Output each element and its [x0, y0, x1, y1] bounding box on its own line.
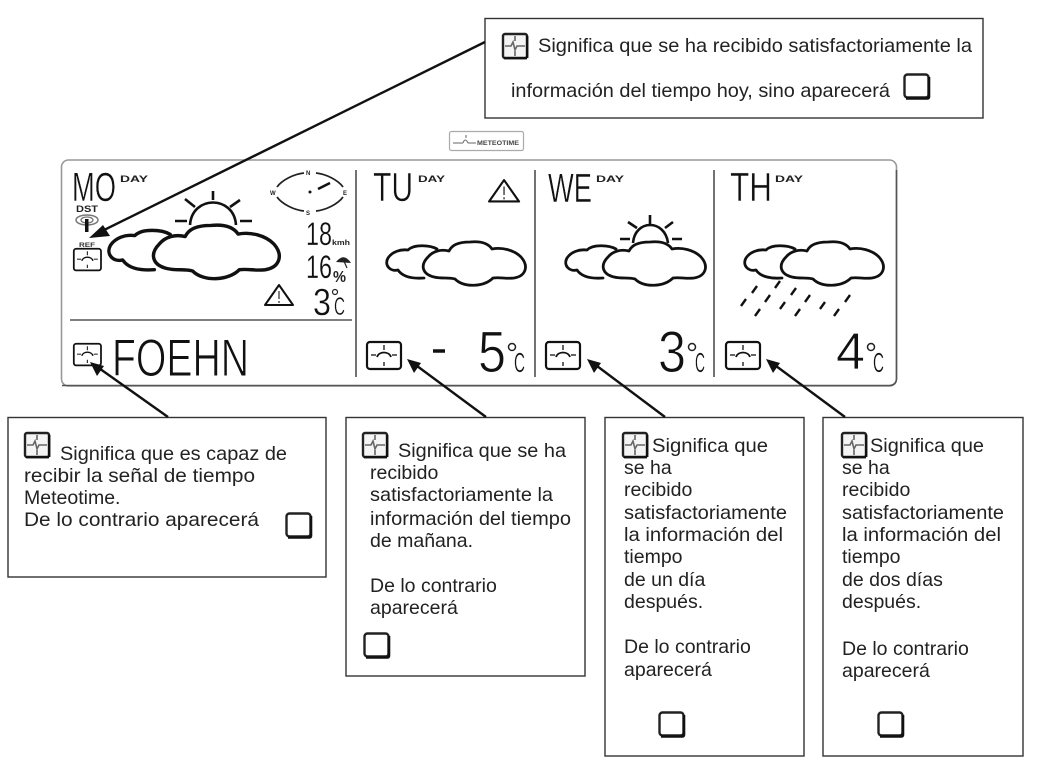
panel: Wednesday forecast: C — [695, 347, 705, 378]
panel: Wednesday forecast — [546, 165, 705, 385]
icon: rain clouds — [741, 242, 883, 316]
icon: empty square — [660, 712, 684, 736]
icon: DST signal — [76, 204, 98, 232]
callout text: De lo contrario — [842, 638, 969, 660]
callout text: la información del — [842, 524, 1001, 546]
callout text: recibido — [842, 479, 910, 501]
panel: Tuesday forecast — [367, 164, 525, 385]
humidity and rain chance: 16 — [306, 249, 332, 285]
icon: Meteotime signal — [726, 342, 760, 369]
callout text: aparecerá — [842, 660, 930, 682]
panel: LCD weather display — [62, 160, 896, 388]
compass — [270, 171, 347, 217]
badge: METEOTIME: METEOTIME — [477, 140, 520, 147]
callout text: satisfactoriamente — [624, 502, 787, 524]
icon: Meteotime signal — [367, 342, 401, 369]
callout text: De lo contrario aparecerá — [24, 509, 259, 531]
icon: warning — [265, 285, 293, 305]
callout text: De lo contrario — [624, 636, 751, 658]
callout text: Significa que — [652, 435, 768, 457]
icon: Meteotime received — [25, 433, 49, 457]
temperature -5 C — [433, 320, 525, 385]
icon: clouds — [387, 242, 525, 285]
temperature 4 C — [836, 323, 884, 381]
callout text: información del tiempo — [370, 508, 571, 530]
callout text: la información del — [624, 524, 783, 546]
temperature 3 C: C — [334, 293, 345, 321]
compass: W — [270, 191, 276, 197]
wind speed: kmh — [332, 240, 350, 247]
icon: Meteotime received — [363, 433, 387, 457]
callout text: aparecerá — [370, 597, 458, 619]
icon: warning — [489, 180, 519, 201]
panel: Monday forecast — [72, 164, 351, 388]
icon: sun behind clouds — [109, 191, 279, 279]
temperature 3 C: 3 — [658, 320, 686, 385]
day label MO: MO — [72, 164, 116, 210]
humidity and rain chance: % — [333, 269, 346, 286]
callout text: Significa que se ha — [398, 440, 566, 462]
day label TU: TU — [373, 164, 413, 210]
temperature -5 C: 5 — [478, 320, 506, 385]
temperature 4 C: 4 — [836, 323, 865, 381]
callout text — [624, 435, 787, 681]
arrow: today callout to Monday icon — [89, 42, 485, 238]
icon: Meteotime signal — [546, 342, 580, 369]
temperature 3 C — [313, 282, 345, 324]
callout text: tiempo — [624, 546, 683, 568]
badge: METEOTIME — [450, 132, 524, 150]
callout text: aparecerá — [624, 659, 712, 681]
day label TH: TH — [730, 164, 772, 210]
icon: Meteotime reception with REF: REF — [79, 243, 95, 249]
callout text — [24, 443, 287, 531]
callout text: Significa que — [870, 435, 984, 457]
compass: E — [343, 191, 347, 197]
callout text: se ha — [842, 457, 890, 479]
callout text: de un día — [624, 569, 705, 591]
day label MO: DAY — [120, 174, 149, 185]
callout text: Significa que es capaz de — [60, 443, 287, 465]
callout: two days later — [823, 418, 1023, 756]
callout text: tiempo — [842, 546, 901, 568]
compass: N — [306, 171, 310, 177]
day label WE: WE — [548, 165, 592, 211]
callout text — [370, 440, 571, 619]
icon: DST signal: DST — [76, 204, 98, 215]
icon: sun behind clouds — [566, 215, 705, 285]
temperature 3 C: 3 — [313, 282, 331, 324]
arrow: one day callout to Wednesday icon — [587, 359, 665, 417]
panel: Thursday forecast — [726, 164, 884, 381]
temperature -5 C: C — [514, 347, 525, 378]
icon: empty square — [904, 74, 929, 98]
callout text: satisfactoriamente — [842, 502, 1004, 524]
wind speed: 18 — [306, 216, 332, 252]
callout text: de dos días — [842, 569, 943, 591]
callout text: satisfactoriamente la — [370, 484, 553, 506]
icon: empty square — [878, 712, 903, 736]
arrow: tomorrow callout to Tuesday icon — [407, 359, 486, 417]
callout text: después. — [624, 591, 703, 613]
callout: tomorrow — [346, 418, 585, 676]
callout text — [842, 435, 1004, 682]
callout text: de mañana. — [370, 530, 473, 552]
icon: empty square — [364, 634, 389, 658]
callout text line 2: información del tiempo hoy, sino aparecerá — [511, 80, 890, 102]
callout text: después. — [842, 591, 921, 613]
icon: Meteotime received — [842, 433, 866, 457]
compass: S — [306, 211, 310, 217]
callout: today — [485, 18, 983, 118]
temperature 4 C: C — [873, 347, 884, 378]
callout text: Meteotime. — [24, 487, 120, 509]
day label TU: DAY — [418, 174, 446, 185]
icon: Meteotime signal — [74, 344, 101, 365]
icon: Meteotime received — [503, 34, 527, 58]
weather text FOEHN: FOEHN — [112, 329, 249, 388]
arrow: two days callout to Thursday icon — [766, 359, 845, 417]
icon: empty square — [286, 514, 311, 538]
callout text: se ha — [624, 457, 672, 479]
callout text: recibir la señal de tiempo — [24, 465, 255, 487]
callout text: recibido — [370, 462, 438, 484]
callout text: De lo contrario — [370, 575, 497, 597]
callout text: recibido — [624, 479, 692, 501]
callout: reception capability — [8, 418, 326, 577]
day label WE: DAY — [596, 174, 625, 185]
temperature 3 C — [658, 320, 705, 385]
icon: Meteotime reception with REF — [74, 243, 101, 270]
icon: Meteotime received — [623, 433, 647, 457]
callout: one day later — [605, 418, 804, 756]
arrow: reception callout to FOEHN icon — [90, 362, 168, 417]
day label TH: DAY — [775, 174, 804, 185]
callout text: Significa que se ha recibido satisfactoriamente la — [538, 35, 972, 57]
